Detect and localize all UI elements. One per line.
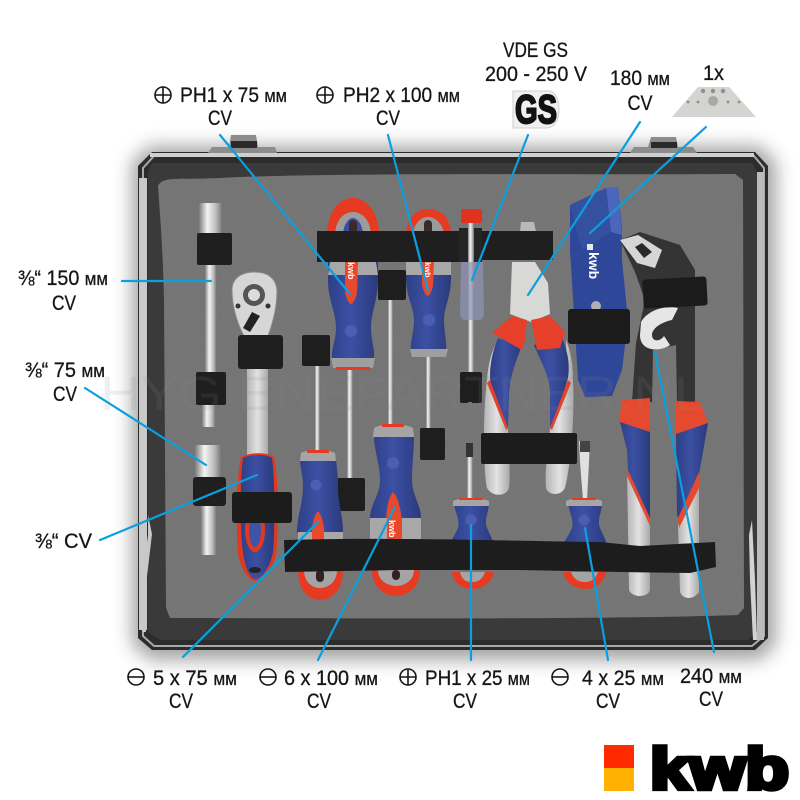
tool: utility knife (568, 187, 630, 397)
tool: water pump pliers (619, 232, 708, 598)
label: PH1 x 25: PH1 x 25 мм (425, 667, 530, 690)
label: 4 x 25: CV (596, 690, 620, 713)
label: 180 mm: CV (628, 92, 652, 115)
label: 180 mm: 180 мм (610, 67, 670, 90)
tool: combination pliers (481, 222, 577, 495)
tool: screwdriver PH1 x 75: kwb (346, 262, 356, 280)
label: 3/8 150 mm: ⅜“ 150 мм (18, 267, 108, 290)
right clasp (749, 520, 757, 640)
logo: kwb (604, 737, 789, 800)
label: 3/8 75 mm: CV (53, 383, 77, 406)
label: 4 x 25: 4 x 25 мм (582, 667, 664, 690)
tester shaft over strap (468, 228, 474, 262)
label: VDE GS: VDE GS (503, 39, 568, 62)
tool: long socket extension (196, 203, 232, 427)
tool: screwdriver 6 x 100 (370, 270, 421, 596)
label: 6 x 100: CV (307, 690, 331, 713)
label: 180 mm (610, 67, 670, 115)
label: 240 mm (680, 665, 742, 711)
tester clip over top strap (459, 228, 482, 262)
foam insert (158, 174, 744, 618)
label: PH1 x 75: PH1 x 75 мм (180, 84, 287, 107)
label: 4 x 25 (552, 667, 664, 713)
tool: short socket adapter (193, 445, 226, 555)
label: 240 mm: CV (699, 688, 723, 711)
label: 3/8 150 mm: CV (52, 292, 76, 315)
label: VDE GS: 200 - 250 V (485, 63, 587, 86)
icon: GS mark: GS (515, 88, 557, 132)
label: 3/8 75 mm: ⅜“ 75 мм (25, 359, 105, 382)
label: 6 x 100: 6 x 100 мм (284, 667, 378, 690)
label: 5 x 75 (128, 667, 237, 713)
tool: stubby screwdriver PH1 x 25 (450, 443, 494, 589)
left clasp (142, 515, 152, 632)
tool: screwdriver 5 x 75 (297, 335, 343, 600)
label: PH2 x 100 (317, 84, 460, 130)
icon: spare blade (672, 87, 756, 117)
tool case (132, 135, 776, 660)
label: PH1 x 25 (400, 667, 530, 713)
tool: voltage tester (460, 209, 484, 411)
label: 3/8 150 mm (18, 267, 108, 315)
tool: utility knife: kwb (586, 252, 602, 279)
label: VDE GS (485, 39, 587, 86)
label: 5 x 75: 5 x 75 мм (153, 667, 237, 690)
top left latch (208, 135, 277, 153)
label: 3/8 CV: ⅜“ CV (35, 530, 92, 553)
label: PH1 x 25: CV (453, 690, 477, 713)
label: 6 x 100 (260, 667, 378, 713)
label: PH2 x 100: CV (376, 107, 400, 130)
watermark: HYGIENEPARTNER.NL (100, 368, 705, 421)
label: 3/8 75 mm (25, 359, 105, 406)
label: 240 mm: 240 мм (680, 665, 742, 688)
tool: screwdriver 6 x 100: kwb (387, 520, 397, 538)
label: PH2 x 100: PH2 x 100 мм (343, 84, 460, 107)
tool: stubby screwdriver 4 x 25 (563, 441, 607, 589)
tool: ratchet (232, 272, 292, 581)
label: 5 x 75: CV (169, 690, 193, 713)
top right latch (630, 137, 697, 153)
bottom elastic strap (284, 539, 716, 573)
top elastic strap (317, 231, 553, 262)
tool: screwdriver PH2 x 100 (406, 209, 451, 460)
label: PH1 x 75: CV (208, 107, 232, 130)
label: 1x: 1x (703, 62, 724, 85)
callout lines (85, 122, 714, 660)
label: PH1 x 75 (155, 84, 287, 130)
tool: screwdriver PH2 x 100: kwb (423, 262, 432, 278)
tool: screwdriver PH1 x 75 (327, 198, 379, 511)
